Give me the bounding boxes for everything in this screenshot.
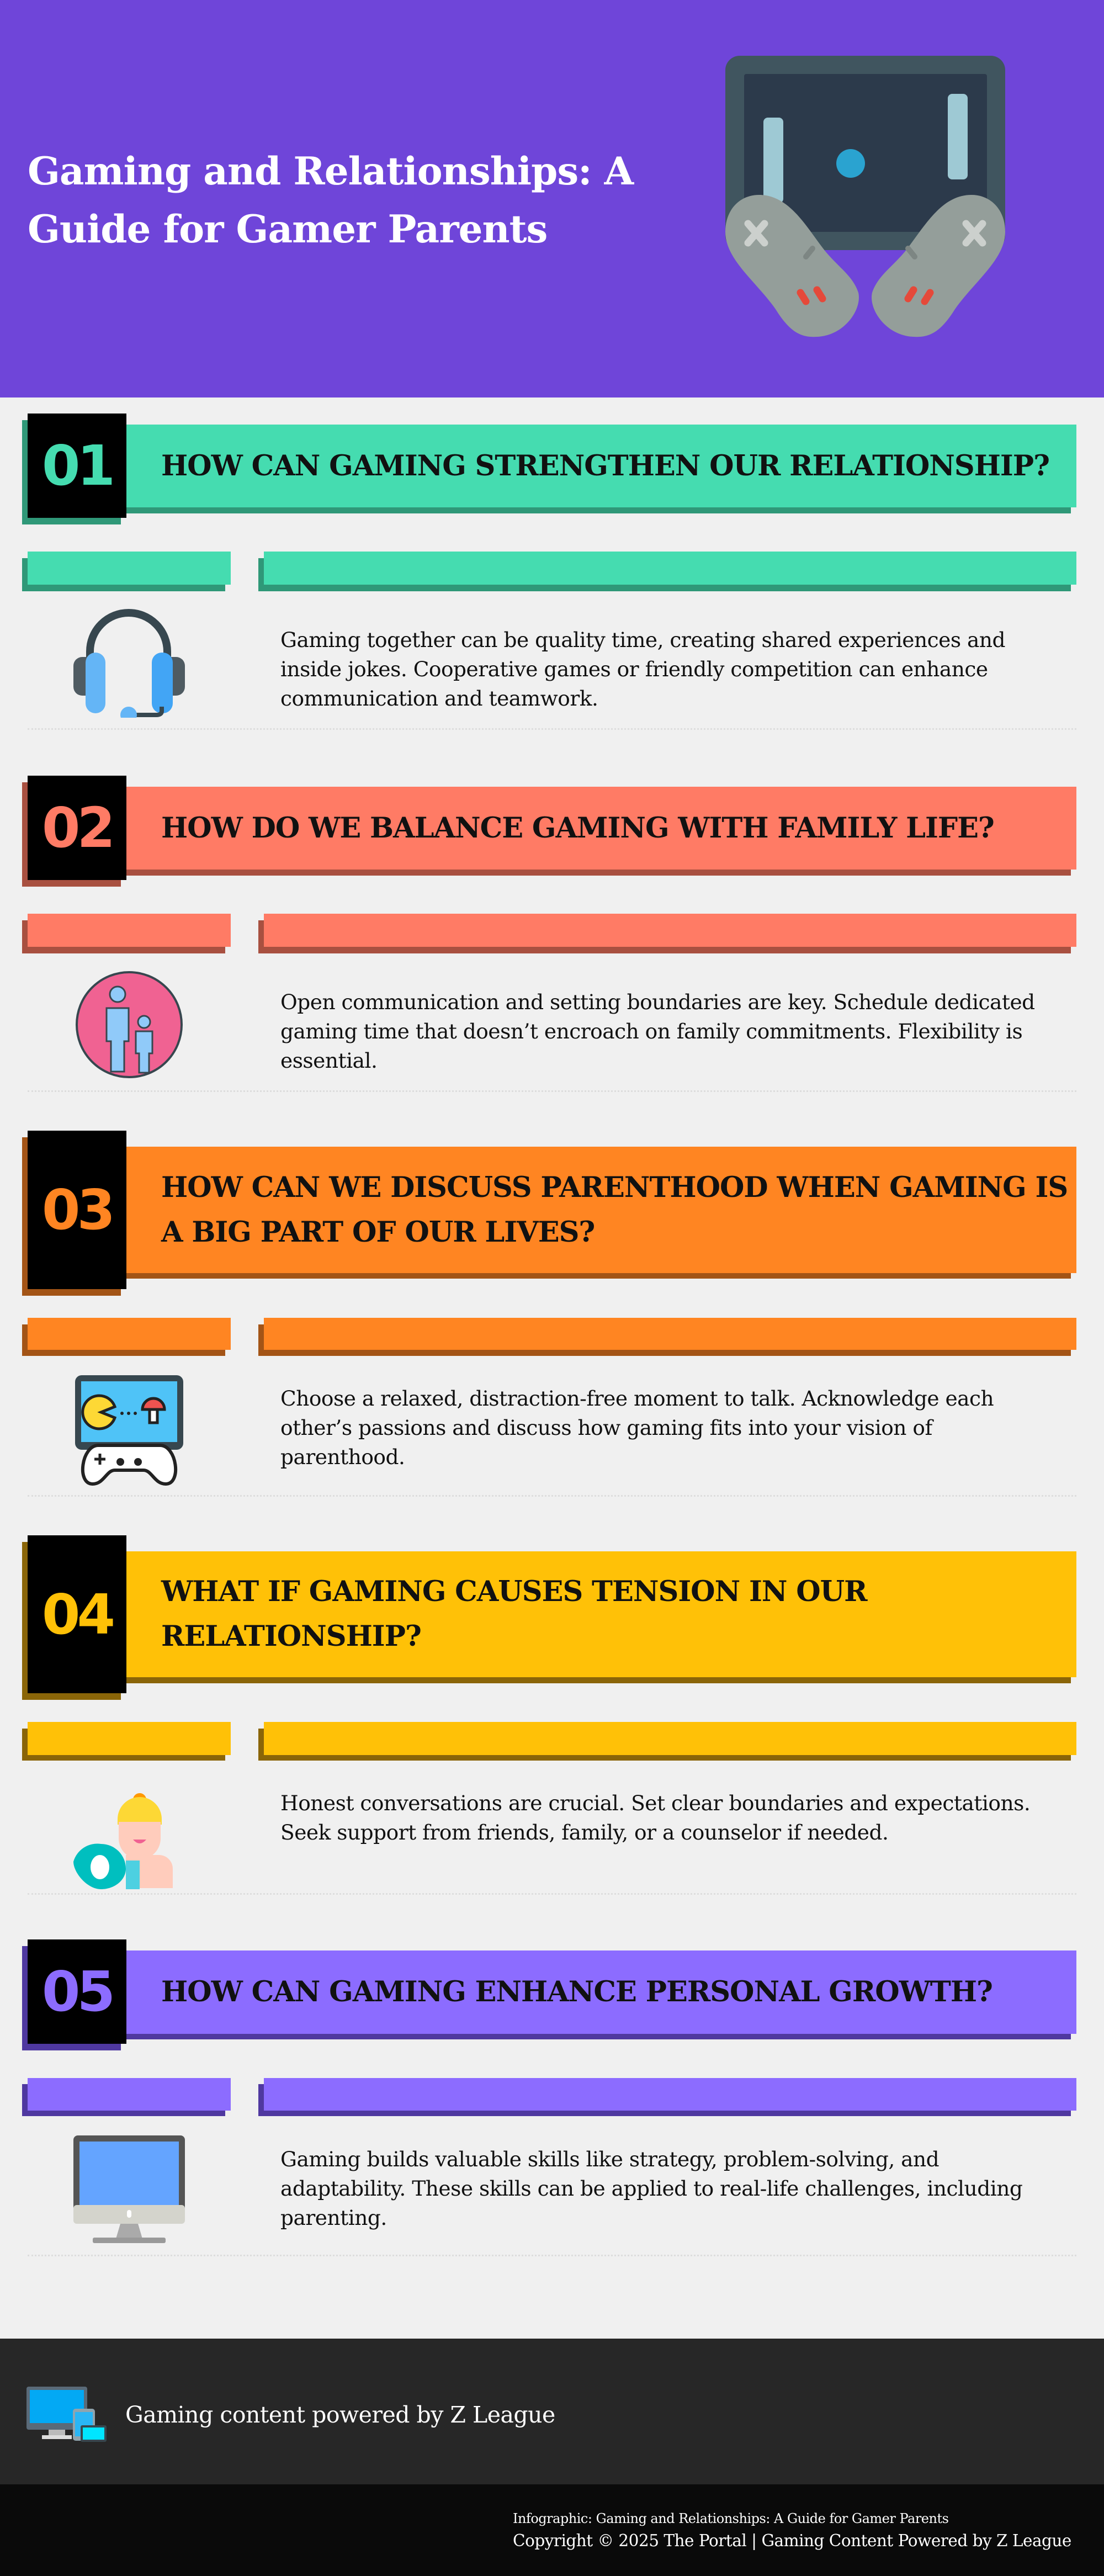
heading bar 05 — [126, 1950, 1076, 2034]
heading bar 04: RELATIONSHIP? — [161, 1620, 421, 1653]
heading bar 04 — [126, 1551, 1076, 1677]
text 03: Choose a relaxed, distraction-free moment to talk. Acknowledge each — [280, 1386, 994, 1411]
icon: monitor — [73, 2135, 185, 2243]
text 05: parenting. — [280, 2206, 387, 2230]
icon: devices — [26, 2387, 107, 2442]
text 04 — [280, 1791, 1030, 1844]
icon: game screen and controller — [75, 1375, 183, 1486]
number 05: 05 — [42, 1959, 112, 2024]
text 02 — [280, 990, 1035, 1073]
number 01 — [28, 414, 126, 518]
text 01: inside jokes. Cooperative games or friendly competition can enhance — [280, 657, 988, 681]
icon: parent and child — [76, 971, 183, 1078]
text 01 — [280, 628, 1005, 711]
panel: section 04 — [22, 1535, 1076, 1895]
heading bar 02 — [126, 787, 1076, 870]
title: Gaming and Relationships: A — [28, 149, 633, 194]
number 04: 04 — [42, 1582, 112, 1646]
heading bar 01 — [126, 425, 1076, 507]
heading bar 03: HOW CAN WE DISCUSS PARENTHOOD WHEN GAMING IS — [161, 1170, 1068, 1204]
text 02: essential. — [280, 1048, 377, 1073]
panel: section 02 — [22, 776, 1076, 1092]
number 03 — [28, 1131, 126, 1289]
bottom bar — [0, 2484, 1104, 2576]
number 02 — [28, 776, 126, 880]
number 02: 02 — [42, 796, 112, 860]
text 05: Gaming builds valuable skills like strategy, problem-solving, and — [280, 2147, 939, 2171]
header — [0, 0, 1104, 397]
text 05: adaptability. These skills can be applied to real-life challenges, including — [280, 2176, 1022, 2201]
heading bar 02: HOW DO WE BALANCE GAMING WITH FAMILY LIFE? — [161, 812, 994, 845]
credits: Infographic: Gaming and Relationships: A Guide for Gamer Parents — [513, 2511, 948, 2526]
heading bar 01: HOW CAN GAMING STRENGTHEN OUR RELATIONSHIP? — [161, 449, 1049, 483]
text 04: Seek support from friends, family, or a counselor if needed. — [280, 1820, 888, 1844]
panel: section 01 — [22, 414, 1076, 730]
heading bar 05: HOW CAN GAMING ENHANCE PERSONAL GROWTH? — [161, 1975, 992, 2008]
icon: woman with pin — [73, 1793, 173, 1889]
heading bar 03: A BIG PART OF OUR LIVES? — [161, 1216, 595, 1249]
number 05 — [28, 1939, 126, 2044]
text 05 — [280, 2147, 1022, 2230]
text 01: Gaming together can be quality time, creating shared experiences and — [280, 628, 1005, 652]
heading bar 04: WHAT IF GAMING CAUSES TENSION IN OUR — [161, 1575, 867, 1608]
title — [28, 149, 634, 252]
icon: game console — [725, 56, 1005, 337]
text 02: gaming time that doesn’t encroach on family commitments. Flexibility is — [280, 1019, 1022, 1043]
text 03 — [280, 1386, 994, 1469]
icon: headset — [73, 609, 185, 718]
text 03: parenthood. — [280, 1445, 405, 1469]
text 01: communication and teamwork. — [280, 686, 598, 711]
panel: section 05 — [22, 1939, 1076, 2256]
text 02: Open communication and setting boundaries are key. Schedule dedicated — [280, 990, 1035, 1014]
text 03: other’s passions and discuss how gaming fits into your vision of — [280, 1416, 932, 1440]
footer text: Gaming content powered by Z League — [125, 2402, 555, 2428]
heading bar 03 — [126, 1147, 1076, 1273]
number 01: 01 — [42, 433, 112, 498]
bottom bar: Copyright © 2025 The Portal | Gaming Content Powered by Z League — [513, 2531, 1071, 2550]
footer — [0, 2339, 1104, 2484]
title: Guide for Gamer Parents — [28, 207, 547, 252]
number 03: 03 — [42, 1178, 112, 1242]
text 04: Honest conversations are crucial. Set clear boundaries and expectations. — [280, 1791, 1030, 1815]
panel: section 03 — [22, 1131, 1076, 1497]
number 04 — [28, 1535, 126, 1693]
